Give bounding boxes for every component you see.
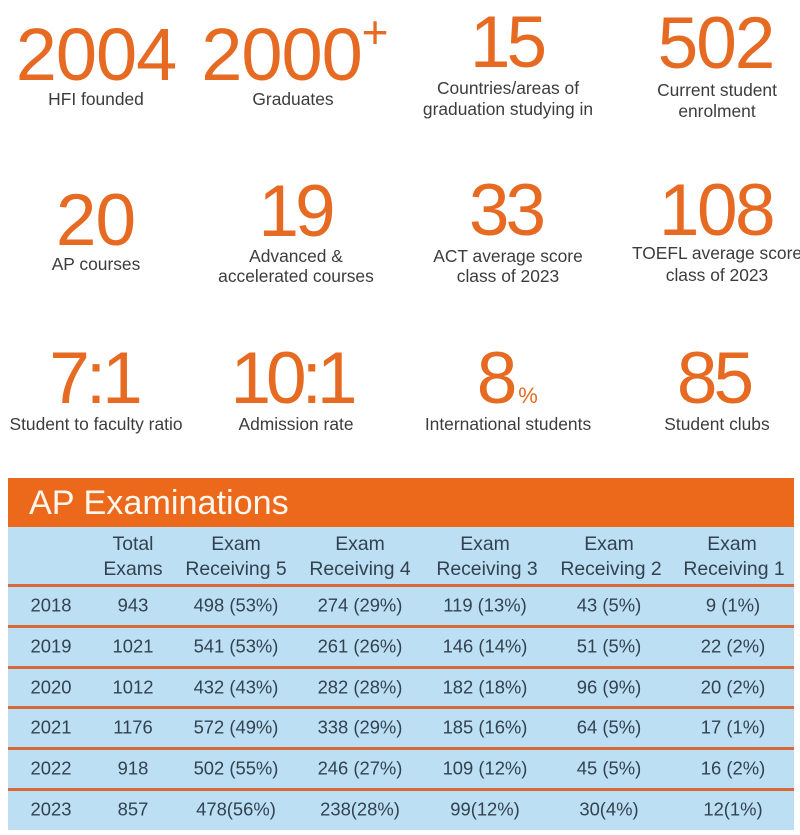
column headers: Receiving 3 [436,558,538,580]
stat: 15 countries: Countries/areas of [437,78,579,98]
stat: 7:1 ratio [9,338,183,434]
column headers: Exam [460,533,510,555]
row 2019: 2019 [31,636,71,656]
row 2023: 99(12%) [450,798,520,820]
column headers: Receiving 1 [683,558,785,580]
table background [8,527,794,830]
row 2022: 502 (55%) [194,758,278,778]
row 2023: 12(1%) [703,798,763,820]
row 2021 [31,716,765,738]
row 2019: 541 (53%) [194,636,278,656]
column headers: Exam [211,533,261,555]
stat: 85 clubs: 85 [677,338,751,419]
column headers: Exams [103,558,163,580]
row 2020: 182 (18%) [443,676,527,698]
stat: 2000+ graduates: + [362,6,388,58]
row 2018: 43 (5%) [577,594,641,616]
stat: 502 enrolment: enrolment [678,101,756,121]
row 2023 [31,798,763,820]
stat: 2000+ graduates [201,6,388,109]
table heading [8,478,794,527]
row 2018: 2018 [31,594,71,616]
column headers: Receiving 5 [185,558,287,580]
stat: 15 countries: graduation studying in [423,99,593,119]
row 2021: 185 (16%) [443,716,527,738]
row 2022 [31,758,765,778]
stat: 2000+ graduates: 2000 [201,13,362,96]
stat: 33 ACT: class of 2023 [457,266,559,286]
row 2020: 20 (2%) [701,676,765,698]
stat: 85 clubs: Student clubs [664,414,770,434]
row 2021: 338 (29%) [318,716,402,738]
row 2018: 9 (1%) [706,594,760,616]
row 2023: 30(4%) [579,798,639,820]
stat: 85 clubs [664,338,770,434]
row 2022: 246 (27%) [318,758,402,778]
row 2023: 857 [118,798,148,820]
stat: 8% international: % [518,383,538,408]
panel: AP Examinations table [8,478,794,830]
stat: 2004 HFI founded: HFI founded [48,89,144,109]
row 2019: 51 (5%) [577,636,641,656]
stat: 108 TOEFL: class of 2023 [666,265,768,285]
stat: 502 enrolment: Current student [657,80,777,100]
stat: 19 advanced courses [218,171,374,286]
column headers: Total [113,533,153,555]
row 2019: 22 (2%) [701,636,765,656]
stat: 20 AP courses: 20 [56,180,135,261]
stat: 10:1 admission: 10:1 [230,338,355,419]
stat: 33 ACT [433,170,583,286]
row 2019: 146 (14%) [443,636,527,656]
row 2023: 238(28%) [320,798,400,820]
stat: 8% international: International students [425,414,591,434]
stat: 33 ACT: 33 [469,170,543,251]
table heading: AP Examinations [29,484,289,522]
stat: 108 TOEFL [632,170,800,285]
column headers: Exam [584,533,634,555]
row 2021: 64 (5%) [577,716,641,738]
column headers: Receiving 2 [560,558,662,580]
row 2022: 918 [118,758,148,778]
row 2022: 109 (12%) [443,758,527,778]
row 2022: 2022 [31,758,71,778]
row 2021: 1176 [113,716,153,738]
row 2019: 261 (26%) [318,636,402,656]
stat: 15 countries: 15 [470,2,544,83]
row 2020: 282 (28%) [318,676,402,698]
row 2021: 2021 [31,716,71,738]
row 2020 [31,676,765,698]
stat: 502 enrolment [657,3,777,121]
stat: 2000+ graduates: Graduates [252,89,334,109]
row 2018: 498 (53%) [194,594,278,616]
row 2020: 432 (43%) [194,676,278,698]
row 2023: 2023 [31,798,71,820]
stat: 15 countries [423,2,593,119]
stat: 502 enrolment: 502 [658,3,773,84]
stat: 19 advanced courses: Advanced & [249,246,343,266]
column headers: Receiving 4 [309,558,411,580]
column headers: Exam [335,533,385,555]
stat: 10:1 admission: Admission rate [238,414,354,434]
row 2022: 16 (2%) [701,758,765,778]
stat: 7:1 ratio: 7:1 [49,338,140,419]
row 2020: 1012 [113,676,153,698]
row 2019: 1021 [113,636,153,656]
stat: 108 TOEFL: 108 [659,170,773,251]
stat: 7:1 ratio: Student to faculty ratio [9,414,183,434]
row 2018: 119 (13%) [443,594,527,616]
row 2018: 943 [118,594,148,616]
row 2022: 45 (5%) [577,758,641,778]
stat: 19 advanced courses: accelerated courses [218,266,374,286]
column headers: Exam [707,533,757,555]
row 2019 [31,636,765,656]
stat: 20 AP courses: AP courses [52,254,141,274]
stat: 8% international: 8 [477,338,517,419]
row 2023: 478(56%) [196,798,276,820]
row 2018 [31,594,760,616]
stat: 2004 HFI founded: 2004 [16,13,176,96]
row 2021: 17 (1%) [701,716,765,738]
stat: 8% international [425,338,591,434]
row 2021: 572 (49%) [194,716,278,738]
row 2020: 2020 [31,676,71,698]
row 2018: 274 (29%) [318,594,402,616]
column headers [103,533,785,580]
stat: 19 advanced courses: 19 [258,171,333,252]
row 2020: 96 (9%) [577,676,641,698]
stat: 108 TOEFL: TOEFL average score [632,243,800,263]
stat: 33 ACT: ACT average score [433,246,583,266]
